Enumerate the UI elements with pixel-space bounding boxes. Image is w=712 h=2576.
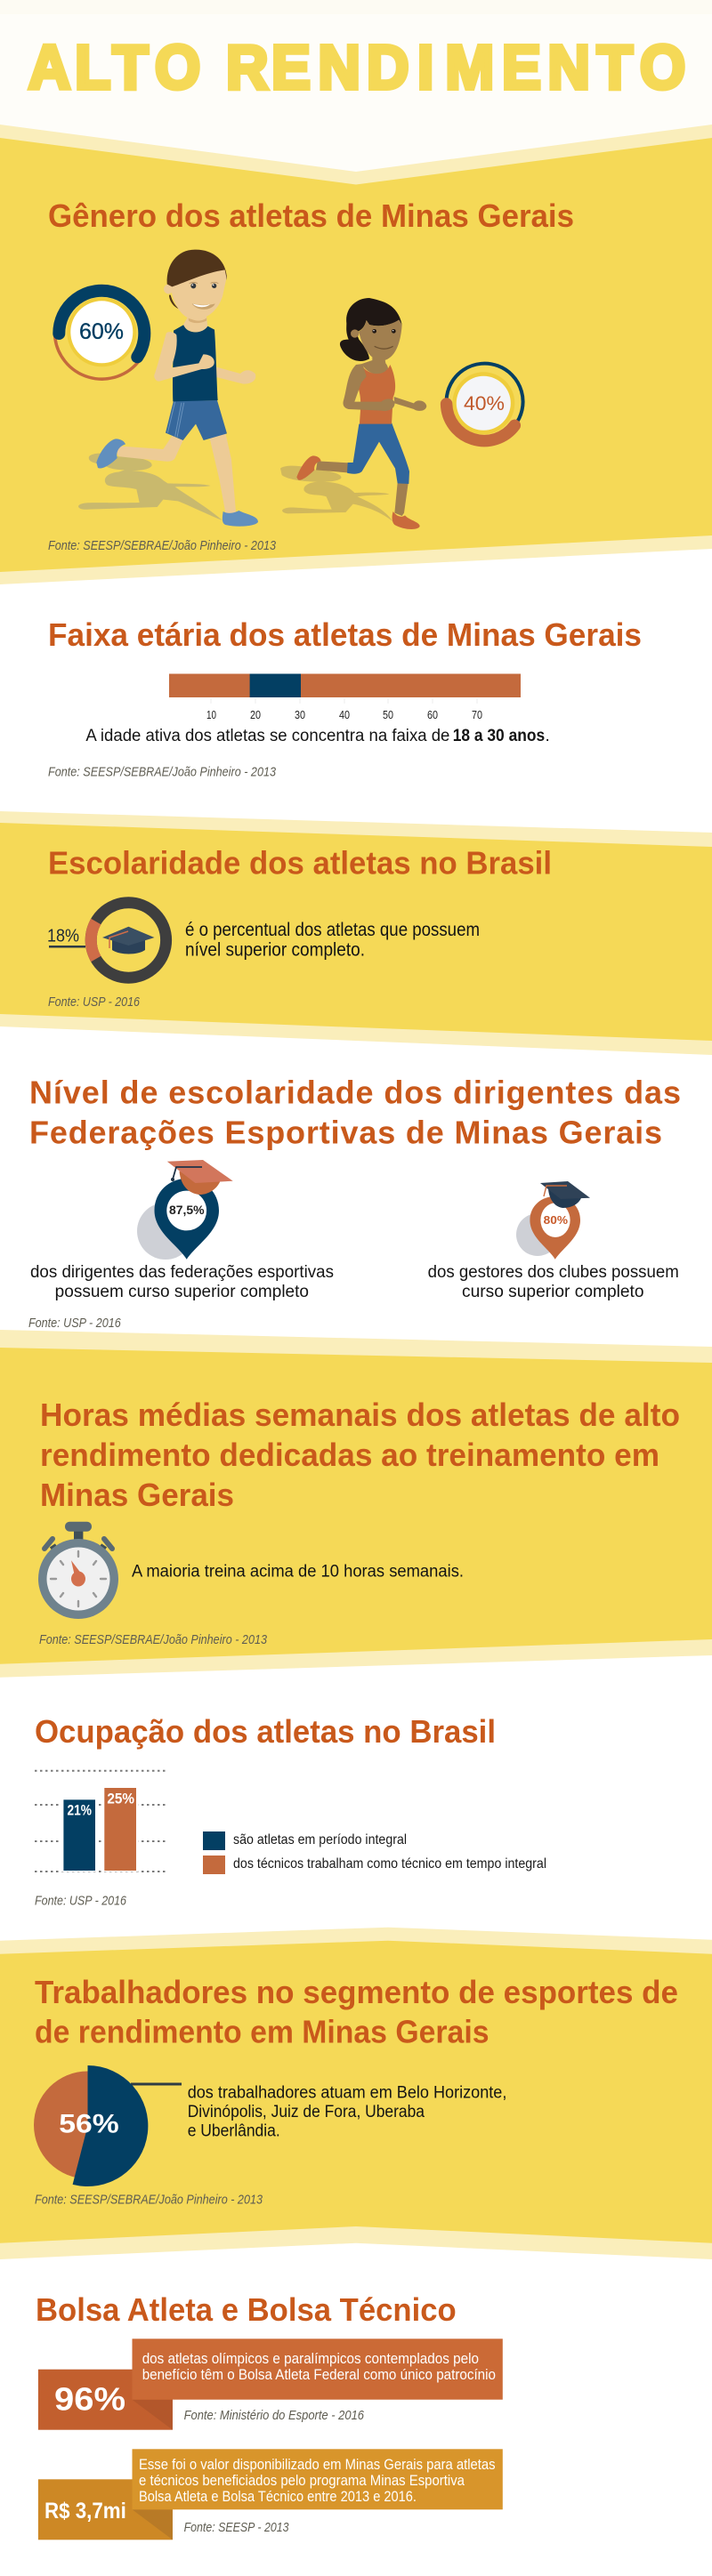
- bar: age scale: 60: [427, 708, 438, 721]
- panel: gender of athletes: [0, 125, 712, 584]
- source note: Fonte: SEESP/SEBRAE/João Pinheiro - 2013: [39, 1632, 268, 1647]
- source note: Fonte: SEESP/SEBRAE/João Pinheiro - 2013: [48, 538, 277, 553]
- donut chart: 40%: [447, 364, 523, 441]
- heading: leaders schooling: Federações Esportivas de Minas Gerais: [29, 1115, 662, 1151]
- donut chart: 60%: [55, 291, 144, 379]
- legend: são atletas em período integral: [233, 1832, 407, 1847]
- ribbon: 96%: benefício têm o Bolsa Atleta Federal como único patrocínio: [142, 2366, 496, 2383]
- heading: workers: Trabalhadores no segmento de esportes de: [35, 1974, 678, 2010]
- title: ALTO RENDIMENTO: [28, 34, 685, 102]
- heading: training hours: Horas médias semanais dos atletas de alto: [40, 1397, 680, 1433]
- bar chart: occupation: 25%: [107, 1790, 134, 1807]
- panel: occupation: [35, 1713, 546, 1909]
- bar: age scale: 40: [339, 708, 350, 721]
- ribbon: 96%: 96%: [54, 2380, 125, 2417]
- source note: Fonte: USP - 2016: [35, 1894, 127, 1909]
- text: leaders: [30, 1263, 334, 1301]
- heading: training hours: rendimento dedicadas ao treinamento em: [40, 1437, 659, 1473]
- text: age statement: 18 a 30 anos: [453, 727, 545, 745]
- heading: age range: Faixa etária dos atletas de Minas Gerais: [48, 616, 642, 653]
- icon: pin 87,5% with cap: [137, 1160, 233, 1260]
- text: workers statement: [188, 2083, 506, 2141]
- bar: age scale: 70: [472, 708, 482, 721]
- text: age statement: A idade ativa dos atletas se concentra na faixa de: [85, 727, 449, 745]
- heading: leaders schooling: [29, 1075, 681, 1151]
- heading: gender: Gênero dos atletas de Minas Gerais: [48, 197, 574, 234]
- ribbon: R$ 3,7mi: Esse foi o valor disponibilizado em Minas Gerais para atletas: [139, 2456, 496, 2473]
- panel: leaders schooling: [28, 1075, 681, 1331]
- donut chart: 18% with graduation cap: [91, 903, 166, 978]
- ribbon: 96%: dos atletas olímpicos e paralímpicos contemplados pelo: [142, 2350, 479, 2367]
- ribbon: R$ 3,7mi: [38, 2449, 503, 2540]
- ribbon: 96%: [38, 2339, 503, 2430]
- text: workers statement: e Uberlândia.: [188, 2122, 280, 2141]
- text: club managers: [428, 1263, 679, 1301]
- heading: scholarships: Bolsa Atleta e Bolsa Técnico: [36, 2291, 457, 2328]
- bar chart: occupation: 21%: [68, 1802, 92, 1819]
- bar chart: occupation: [35, 1771, 166, 1872]
- legend: [203, 1831, 546, 1874]
- text: club managers: curso superior completo: [462, 1283, 644, 1301]
- ribbon: R$ 3,7mi: e técnicos beneficiados pelo programa Minas Esportiva: [139, 2472, 465, 2489]
- text: training statement: A maioria treina acima de 10 horas semanais.: [132, 1563, 464, 1582]
- text: workers statement: Divinópolis, Juiz de Fora, Uberaba: [188, 2103, 425, 2121]
- icon: pin 80% with cap: [516, 1181, 590, 1260]
- ribbon: R$ 3,7mi: R$ 3,7mi: [44, 2499, 126, 2524]
- bar: age scale: [169, 674, 521, 721]
- panel: scholarships: [36, 2291, 503, 2540]
- text: schooling statement: [185, 920, 480, 961]
- source note: Fonte: Ministério do Esporte - 2016: [184, 2408, 365, 2423]
- text: schooling statement: é o percentual dos atletas que possuem: [185, 920, 480, 940]
- donut chart: 60%: 60%: [79, 319, 124, 344]
- pie chart: 56%: [34, 2065, 182, 2186]
- bar: age scale: 30: [295, 708, 305, 721]
- heading: leaders schooling: Nível de escolaridade dos dirigentes das: [29, 1075, 681, 1111]
- icon: pin 80% with cap: 80%: [544, 1213, 568, 1227]
- header background: [0, 0, 712, 178]
- text: leaders: dos dirigentes das federações esportivas: [30, 1263, 334, 1282]
- source note: Fonte: SEESP/SEBRAE/João Pinheiro - 2013: [48, 765, 277, 779]
- source note: Fonte: USP - 2016: [48, 994, 141, 1010]
- heading: athlete schooling: Escolaridade dos atletas no Brasil: [48, 845, 552, 881]
- source note: Fonte: USP - 2016: [28, 1316, 121, 1331]
- heading: workers: de rendimento em Minas Gerais: [35, 2014, 490, 2050]
- bar: age scale: 10: [206, 708, 216, 721]
- heading: training hours: [40, 1397, 680, 1513]
- text: workers statement: dos trabalhadores atuam em Belo Horizonte,: [188, 2083, 506, 2102]
- text: schooling statement: nível superior completo.: [185, 940, 365, 961]
- text: leaders: possuem curso superior completo: [55, 1283, 309, 1301]
- panel: weekly training hours: [0, 1330, 712, 1678]
- heading: workers: [35, 1974, 678, 2050]
- illustration: male runner: [78, 250, 258, 527]
- ribbon: R$ 3,7mi: Bolsa Atleta e Bolsa Técnico entre 2013 e 2016.: [139, 2488, 417, 2505]
- label: 18%: 18%: [47, 927, 79, 946]
- panel: workers: [0, 1928, 712, 2259]
- bar: age scale: 50: [383, 708, 393, 721]
- heading: training hours: Minas Gerais: [40, 1477, 234, 1513]
- illustration: female runner: [280, 298, 426, 529]
- panel: age range: [48, 616, 642, 779]
- text: age statement: .: [545, 727, 550, 745]
- panel: athlete schooling: [0, 811, 712, 1055]
- pie chart: 56%: 56%: [59, 2109, 119, 2138]
- heading: occupation: Ocupação dos atletas no Brasil: [35, 1713, 496, 1750]
- legend: dos técnicos trabalham como técnico em tempo integral: [233, 1856, 546, 1872]
- icon: pin 87,5% with cap: 87,5%: [169, 1203, 205, 1217]
- source note: Fonte: SEESP/SEBRAE/João Pinheiro - 2013: [35, 2193, 263, 2208]
- bar: age scale: 20: [250, 708, 261, 721]
- donut chart: 40%: 40%: [464, 392, 505, 415]
- source note: Fonte: SEESP - 2013: [184, 2520, 289, 2535]
- icon: stopwatch: [38, 1522, 118, 1619]
- text: club managers: dos gestores dos clubes possuem: [428, 1263, 679, 1282]
